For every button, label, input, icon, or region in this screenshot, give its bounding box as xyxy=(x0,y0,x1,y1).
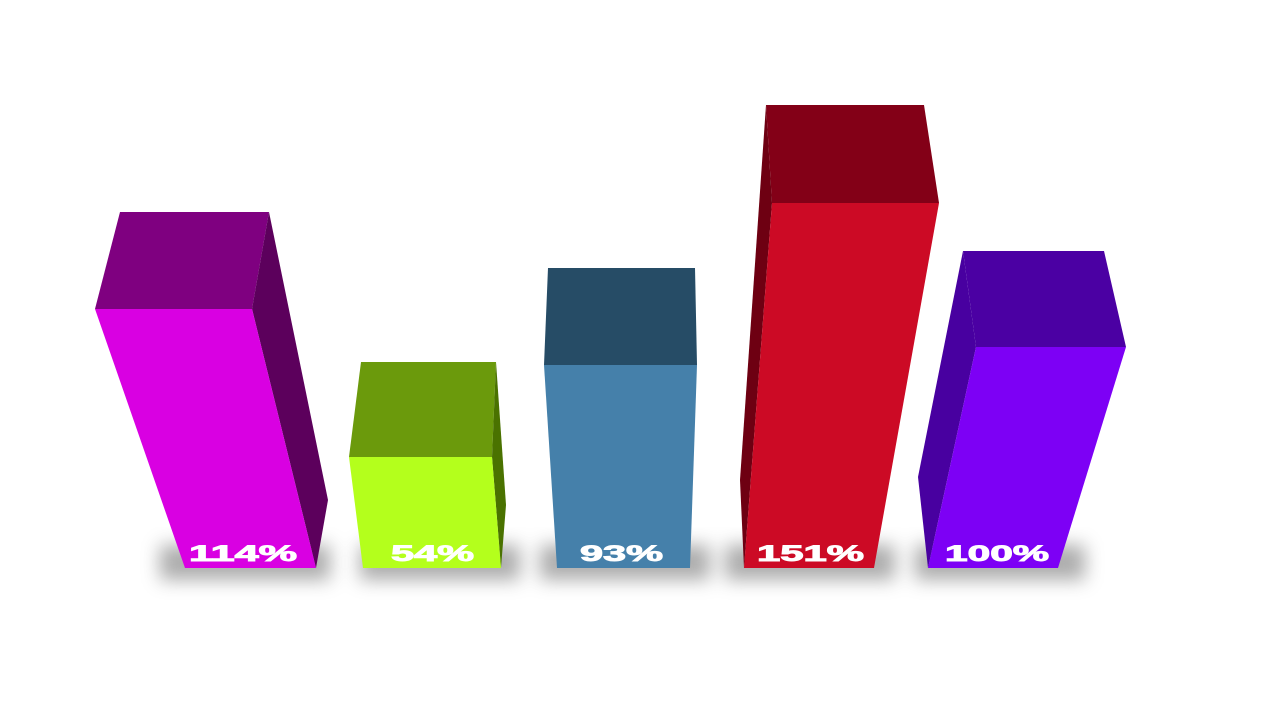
label: 100%: 100% xyxy=(945,541,1049,566)
bar: 151% red xyxy=(740,105,939,568)
label: 54%: 54% xyxy=(391,541,474,566)
label: 114%: 114% xyxy=(189,541,297,566)
label: 151%: 151% xyxy=(757,541,864,566)
bar: 54% lime xyxy=(349,362,506,568)
bar: 114% magenta xyxy=(95,212,328,568)
bar: 93% blue xyxy=(544,268,697,568)
label: 93%: 93% xyxy=(580,541,663,566)
bar: 100% violet xyxy=(918,251,1126,568)
shadows xyxy=(160,545,1085,580)
